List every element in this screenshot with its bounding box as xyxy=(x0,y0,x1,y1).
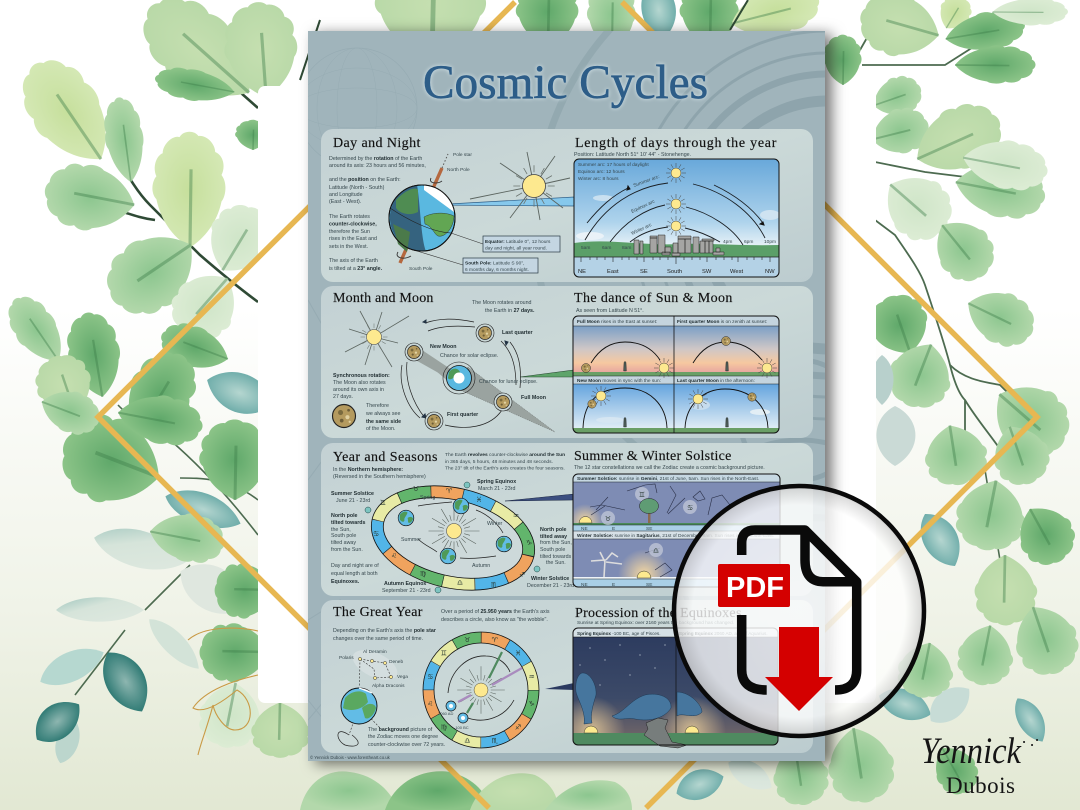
text block: rotation: The axis of the Earth xyxy=(329,258,378,264)
text block: rotation xyxy=(329,156,426,272)
date labels: -100 BC xyxy=(454,725,469,730)
section: Summer and Winter Solstice xyxy=(572,450,780,588)
compass labels: SE xyxy=(640,269,648,275)
season labels xyxy=(401,495,503,569)
text: tilt towards: the Sun, xyxy=(331,527,351,533)
direction labels: E xyxy=(612,582,615,588)
signature: Yennick xyxy=(921,731,1022,772)
panel: great year row xyxy=(321,600,813,753)
wheel signs: ♓ xyxy=(515,650,521,658)
pole labels xyxy=(409,152,472,272)
beam: sunlight to Stonehenge diagram xyxy=(431,197,574,206)
leader lines xyxy=(417,233,483,265)
copyright: © Yennick Dubois - www.forestheart.co.uk xyxy=(310,755,391,760)
horizon suns xyxy=(584,726,699,733)
text block: rotation: and the position on the Earth: xyxy=(329,177,401,183)
text: same side xyxy=(366,403,401,432)
pisces fish xyxy=(576,673,596,724)
section: Year and Seasons xyxy=(331,450,574,605)
solstice captions: Summer Solstice: sunrise in Gemini, 21st of June, 5am. Sun rises in the North-East. xyxy=(577,476,759,482)
suns xyxy=(666,163,686,236)
lens circle xyxy=(674,486,924,736)
text: pole star: changes over the same period of time. xyxy=(333,636,423,642)
heading: The Great Year xyxy=(333,605,423,620)
moon labels: Last quarter xyxy=(502,330,533,336)
time labels: 10pm xyxy=(764,239,776,245)
text: tilt away: the Sun. xyxy=(546,560,566,566)
foliage: right branches xyxy=(823,0,1080,493)
text: pole star: Depending on the Earth's axis the pole star xyxy=(333,628,436,634)
wheel signs: ♍ xyxy=(441,724,448,732)
moon labels: New Moon xyxy=(430,344,456,350)
PDF download badge xyxy=(674,486,924,736)
text: tilt away: tilted towards xyxy=(540,554,572,560)
direction labels xyxy=(581,526,652,588)
sun xyxy=(345,311,409,367)
subtitle: As seen from Latitude N 51°. xyxy=(576,308,644,314)
text: autumn equinox: September 21 - 23rd xyxy=(382,588,431,594)
white card behind poster xyxy=(258,86,876,703)
heading: Summer & Winter Solstice xyxy=(574,449,732,464)
text: winter solstice xyxy=(527,576,574,589)
wheel signs: ♎ xyxy=(464,737,471,745)
compass labels: NW xyxy=(765,269,775,275)
text: synchronous rotation: The Moon also rotates xyxy=(333,380,386,386)
zodiac signs: ♐ xyxy=(519,571,525,579)
poster background pattern xyxy=(308,31,925,747)
arc legend: Summer arc: 17 hours of daylight xyxy=(578,162,649,168)
zodiac signs: ♍ xyxy=(420,570,427,578)
direction labels: NE xyxy=(581,526,588,532)
text block: rotation: The Earth rotates xyxy=(329,214,370,220)
heading: Length of days through the year xyxy=(575,136,777,151)
compass labels: South xyxy=(667,269,682,275)
foliage: top strip xyxy=(300,0,825,80)
star labels: Polaris xyxy=(339,655,354,661)
callout: equator: day and night, all year round. xyxy=(485,246,547,252)
text: same side: of the Moon. xyxy=(366,426,395,432)
text: equinoxes xyxy=(331,563,379,585)
compass labels xyxy=(578,269,775,275)
text: pole star xyxy=(333,628,436,642)
text: background zodiac xyxy=(368,727,445,748)
text: moon rotation xyxy=(472,300,535,314)
season labels: Spring xyxy=(420,495,435,501)
compass labels: East xyxy=(607,269,619,275)
icon: PDF label: PDF xyxy=(726,572,784,604)
star labels: Alpha Draconis xyxy=(372,683,405,689)
text block: rotation: rises in the East and xyxy=(329,236,377,242)
arc labels: Winter arc xyxy=(630,222,653,237)
moon orbit diagram xyxy=(401,319,555,432)
chart: sun arcs over Stonehenge xyxy=(574,159,780,277)
scene captions: Last quarter Moon in the afternoon: xyxy=(677,378,755,384)
wheel signs: ♈ xyxy=(491,636,498,644)
text: spring equinox: Spring Equinox xyxy=(477,479,516,485)
section: Length of days xyxy=(574,136,780,277)
text: moon rotation: The Moon rotates around xyxy=(472,300,532,306)
text: same side: Therefore xyxy=(366,403,389,409)
text: synchronous rotation xyxy=(333,373,390,400)
captions xyxy=(577,631,768,636)
axis lines xyxy=(467,652,502,713)
captions: Spring Equinox 2060 AD, age of Aquarius. xyxy=(679,631,768,636)
section: The Great Year xyxy=(333,605,574,748)
text: revolution: in 365 days, 5 hours, 48 minutes and 48 seconds. xyxy=(445,459,553,465)
solstice captions: Winter Solstice: sunrise in Sagitarius, 21st of December, 8am. Sun rises in the South-East. xyxy=(577,533,774,539)
scene arcs xyxy=(583,342,768,428)
zodiac wheel xyxy=(423,632,539,748)
small earths xyxy=(446,701,468,723)
seasonal arrows xyxy=(418,502,503,558)
text: synchronous rotation: 27 days. xyxy=(333,394,353,400)
zodiac disc signs: ♊ xyxy=(639,491,645,499)
time labels xyxy=(581,239,776,251)
text: autumn equinox: Autumn Equinox xyxy=(384,581,426,587)
text: northern hemisphere: In the Northern hemisphere: xyxy=(333,467,403,473)
pole labels: South Pole xyxy=(409,266,433,272)
text: revolution: The 23° tilt of the Earth's axis creates the four seasons. xyxy=(445,466,565,472)
compass labels: West xyxy=(730,269,743,275)
foliage: lower right branches xyxy=(822,470,1080,808)
text: northern hemisphere xyxy=(333,467,426,480)
season labels: Autumn xyxy=(472,563,490,569)
wheel signs: ♉ xyxy=(464,636,471,644)
text: equinoxes: equal length at both xyxy=(331,571,378,577)
text: tilt towards: from the Sun. xyxy=(331,547,363,553)
moon phases xyxy=(405,324,512,430)
season labels: Summer xyxy=(401,537,421,543)
heading: Year and Seasons xyxy=(333,450,438,465)
text: summer solstice xyxy=(331,491,374,504)
arc labels xyxy=(630,174,660,237)
text block: rotation: Latitude (North - South) xyxy=(329,185,385,191)
zodiac signs: ♋ xyxy=(373,530,379,538)
marker icons xyxy=(365,482,540,593)
text: period: describes a circle, also know as "the wobble". xyxy=(441,617,548,623)
time labels: 5am xyxy=(581,245,590,251)
text: period xyxy=(441,609,550,623)
text: tilt away: South pole xyxy=(540,547,565,553)
observers xyxy=(624,362,728,427)
moon illustration xyxy=(332,404,356,428)
foliage: bottom strip xyxy=(300,740,833,810)
direction labels: SE xyxy=(646,526,652,532)
arc labels: Summer arc: xyxy=(633,174,660,189)
summer tree xyxy=(640,498,658,523)
zodiac disc signs: ♉ xyxy=(605,515,611,523)
earth with tilted axis xyxy=(389,154,455,263)
suns xyxy=(591,358,777,409)
text: equinoxes: Equinoxes. xyxy=(331,579,360,585)
zodiac disc signs: ♋ xyxy=(687,504,693,512)
panel: year and seasons row xyxy=(321,443,813,596)
pole labels: North Pole xyxy=(447,167,470,173)
text: summer solstice: Summer Solstice xyxy=(331,491,374,497)
zodiac signs: ♏ xyxy=(491,581,498,589)
chart: four sky scenes xyxy=(573,316,779,433)
pole labels: Pole star xyxy=(453,152,472,158)
text block: rotation: therefore the Sun xyxy=(329,229,370,235)
zodiac signs: ♊ xyxy=(380,499,386,507)
constellations xyxy=(590,484,730,577)
text: spring equinox xyxy=(477,479,516,492)
zodiac ellipse xyxy=(361,471,545,605)
panel: month and moon row xyxy=(321,286,813,438)
sun xyxy=(428,506,480,556)
compass labels: NE xyxy=(578,269,586,275)
star labels: Deneb xyxy=(389,659,403,665)
icon: download arrow xyxy=(765,627,833,711)
wheel signs: ♌ xyxy=(427,700,433,708)
heading: Procession of the Equinoxes xyxy=(575,606,742,621)
beam to dance diagram xyxy=(520,370,574,377)
heading: The dance of Sun & Moon xyxy=(574,291,733,306)
zodiac signs: ♉ xyxy=(413,485,419,493)
date labels xyxy=(438,711,469,730)
zodiac discs xyxy=(601,487,697,557)
subtitle: The 12 star constellations we call the Zodiac create a cosmic background picture. xyxy=(574,465,765,471)
seasonal earths xyxy=(398,498,512,564)
zodiac disc signs xyxy=(605,491,693,555)
arc legend xyxy=(578,162,649,182)
wobble path xyxy=(338,732,358,746)
callout: equator xyxy=(483,236,560,252)
callout: south pole: South Pole: Latitude S 90°, xyxy=(465,260,525,266)
text: spring equinox: March 21 - 23rd xyxy=(478,486,515,492)
wheel signs: ♊ xyxy=(441,650,447,658)
text: revolution xyxy=(445,452,565,472)
moon labels: Full Moon xyxy=(521,395,546,401)
poster sheet xyxy=(308,31,825,761)
zodiac signs: ♌ xyxy=(391,552,397,560)
zodiac signs: ♎ xyxy=(457,579,463,587)
text block: rotation: is tilted at a 23° angle. xyxy=(329,266,383,272)
subtitle: Sunrise at Spring Equinox: over 2160 years the background has changed. xyxy=(577,620,734,626)
text: tilt towards: tilted towards xyxy=(331,520,365,526)
zodiac signs xyxy=(373,485,532,589)
wheel signs: ♋ xyxy=(427,673,433,681)
moons xyxy=(582,336,756,408)
text: same side: we always see xyxy=(366,411,400,417)
callout: south pole: 6 months day, 6 months night. xyxy=(465,267,529,273)
zodiac signs: ♑ xyxy=(526,539,532,547)
dolmen rock xyxy=(644,718,687,748)
scene captions xyxy=(577,319,767,384)
sun xyxy=(470,152,570,220)
heading: Month and Moon xyxy=(333,291,434,306)
text: tilt away xyxy=(540,527,572,566)
section: dance of Sun and Moon xyxy=(573,291,779,433)
moon labels: First quarter xyxy=(447,412,478,418)
chart: night skies xyxy=(572,628,778,748)
beam to procession diagram xyxy=(545,683,574,690)
text: equinoxes: Day and night are of xyxy=(331,563,379,569)
star labels xyxy=(339,649,408,689)
text: synchronous rotation: around its own axis in xyxy=(333,387,384,393)
text block: rotation: around its axis: 23 hours and 56 minutes, xyxy=(329,163,426,169)
foliage: upper left branch xyxy=(0,0,301,449)
signature xyxy=(921,731,1037,798)
arc labels: Equinox arc xyxy=(630,198,656,215)
text: summer solstice: June 21 - 23rd xyxy=(336,498,370,504)
zodiac disc signs: ♎ xyxy=(653,547,659,555)
scene captions: Full Moon rises in the East at sunset: xyxy=(577,319,657,325)
moon labels: Chance for lunar eclipse. xyxy=(479,379,538,385)
text: revolution: The Earth revolves counter-clockwise around the Sun xyxy=(445,452,565,458)
text: tilt away: North pole xyxy=(540,527,567,533)
text block: rotation: counter-clockwise, xyxy=(329,222,377,228)
time labels: 8am xyxy=(622,245,631,251)
callout: equator: Equator: Latitude 0°, 12 hours xyxy=(485,239,551,245)
text: tilt away: from the Sun, xyxy=(540,540,572,546)
text: same side: the same side xyxy=(366,419,401,425)
moon labels xyxy=(430,330,546,418)
wheel signs: ♐ xyxy=(515,724,521,732)
text: background zodiac: The background picture of xyxy=(368,727,433,733)
solstice suns xyxy=(579,516,651,578)
zodiac signs: ♓ xyxy=(476,496,482,504)
star chart xyxy=(338,644,408,746)
arc legend: Equinox arc: 12 hours xyxy=(578,169,625,175)
sun xyxy=(457,666,505,714)
arc legend: Winter arc: 8 hours xyxy=(578,176,619,182)
text block: rotation: Determined by the rotation of the Earth xyxy=(329,156,422,162)
season labels: Winter xyxy=(487,521,503,527)
text: winter solstice: Winter Solstice xyxy=(531,576,569,582)
text: period: Over a period of 25.950 years the Earth's axis xyxy=(441,609,550,615)
star labels: Al Deramin xyxy=(363,649,387,655)
text: tilt towards xyxy=(331,513,365,553)
time labels: 6am xyxy=(602,245,611,251)
beam to solstice diagram xyxy=(505,494,574,501)
moon labels: Chance for solar eclipse. xyxy=(440,353,498,359)
text: synchronous rotation: Synchronous rotation: xyxy=(333,373,390,379)
direction labels: SE xyxy=(646,582,652,588)
text block: rotation: sets in the West. xyxy=(329,244,368,250)
text block: rotation: (East - West). xyxy=(329,199,361,205)
text: tilt away: tilted away xyxy=(540,534,567,540)
captions: Spring Equinox -100 BC, age of Pisces. xyxy=(577,631,660,636)
wheel signs xyxy=(427,636,535,745)
earth xyxy=(341,688,377,724)
section: Procession of the Equinoxes xyxy=(572,607,778,748)
direction labels: E xyxy=(612,526,615,532)
time labels: 4pm xyxy=(723,239,732,245)
icon: PDF label xyxy=(718,564,790,607)
zodiac signs: ♒ xyxy=(513,512,519,520)
section: Month and Moon xyxy=(332,291,574,432)
precession arc xyxy=(448,656,514,720)
time labels: 6pm xyxy=(744,239,753,245)
text: tilt towards: tilted away xyxy=(331,540,356,546)
text: moon rotation: the Earth in 27 days. xyxy=(485,308,535,314)
date labels: 2060 AD xyxy=(438,711,453,716)
text: background zodiac: counter-clockwise over 72 years. xyxy=(368,742,445,748)
wheel signs: ♑ xyxy=(529,700,535,708)
star labels: Vega xyxy=(397,674,408,680)
wheel signs: ♒ xyxy=(529,673,535,681)
panel: day and night row xyxy=(321,129,813,282)
stonehenge xyxy=(634,235,724,256)
text: background zodiac: the Zodiac moves one degree xyxy=(368,734,438,740)
chart: solstice skies xyxy=(572,474,780,588)
title: Cosmic Cycles xyxy=(423,56,708,109)
text: winter solstice: December 21 - 23rd xyxy=(527,583,574,589)
foliage: lower left branch xyxy=(25,382,310,767)
poster xyxy=(304,24,842,774)
text: tilt towards: South pole xyxy=(331,533,356,539)
text: autumn equinox xyxy=(382,581,431,594)
scene captions: First quarter Moon is on zenith at sunset: xyxy=(677,319,767,325)
icon: document outline xyxy=(742,530,857,690)
compass labels: SW xyxy=(702,269,712,275)
direction labels: NE xyxy=(581,582,588,588)
wheel signs: ♏ xyxy=(491,737,498,745)
callout: south pole xyxy=(463,258,538,273)
winter tree xyxy=(591,552,622,577)
signature: Dubois xyxy=(946,773,1015,798)
text: tilt towards: North pole xyxy=(331,513,358,519)
text: northern hemisphere: (Reversed in the Southern hemisphere) xyxy=(333,474,426,480)
text block: rotation: and Longitude xyxy=(329,192,363,198)
section: Day and Night xyxy=(329,136,574,273)
subtitle: Position: Latitude North 51° 10' 44'' - Stonehenge. xyxy=(574,152,691,158)
zodiac signs: ♈ xyxy=(446,487,453,495)
scene captions: New Moon moves in sync with the sun: xyxy=(577,378,661,384)
solstice captions xyxy=(577,476,774,539)
heading: Day and Night xyxy=(333,136,421,151)
